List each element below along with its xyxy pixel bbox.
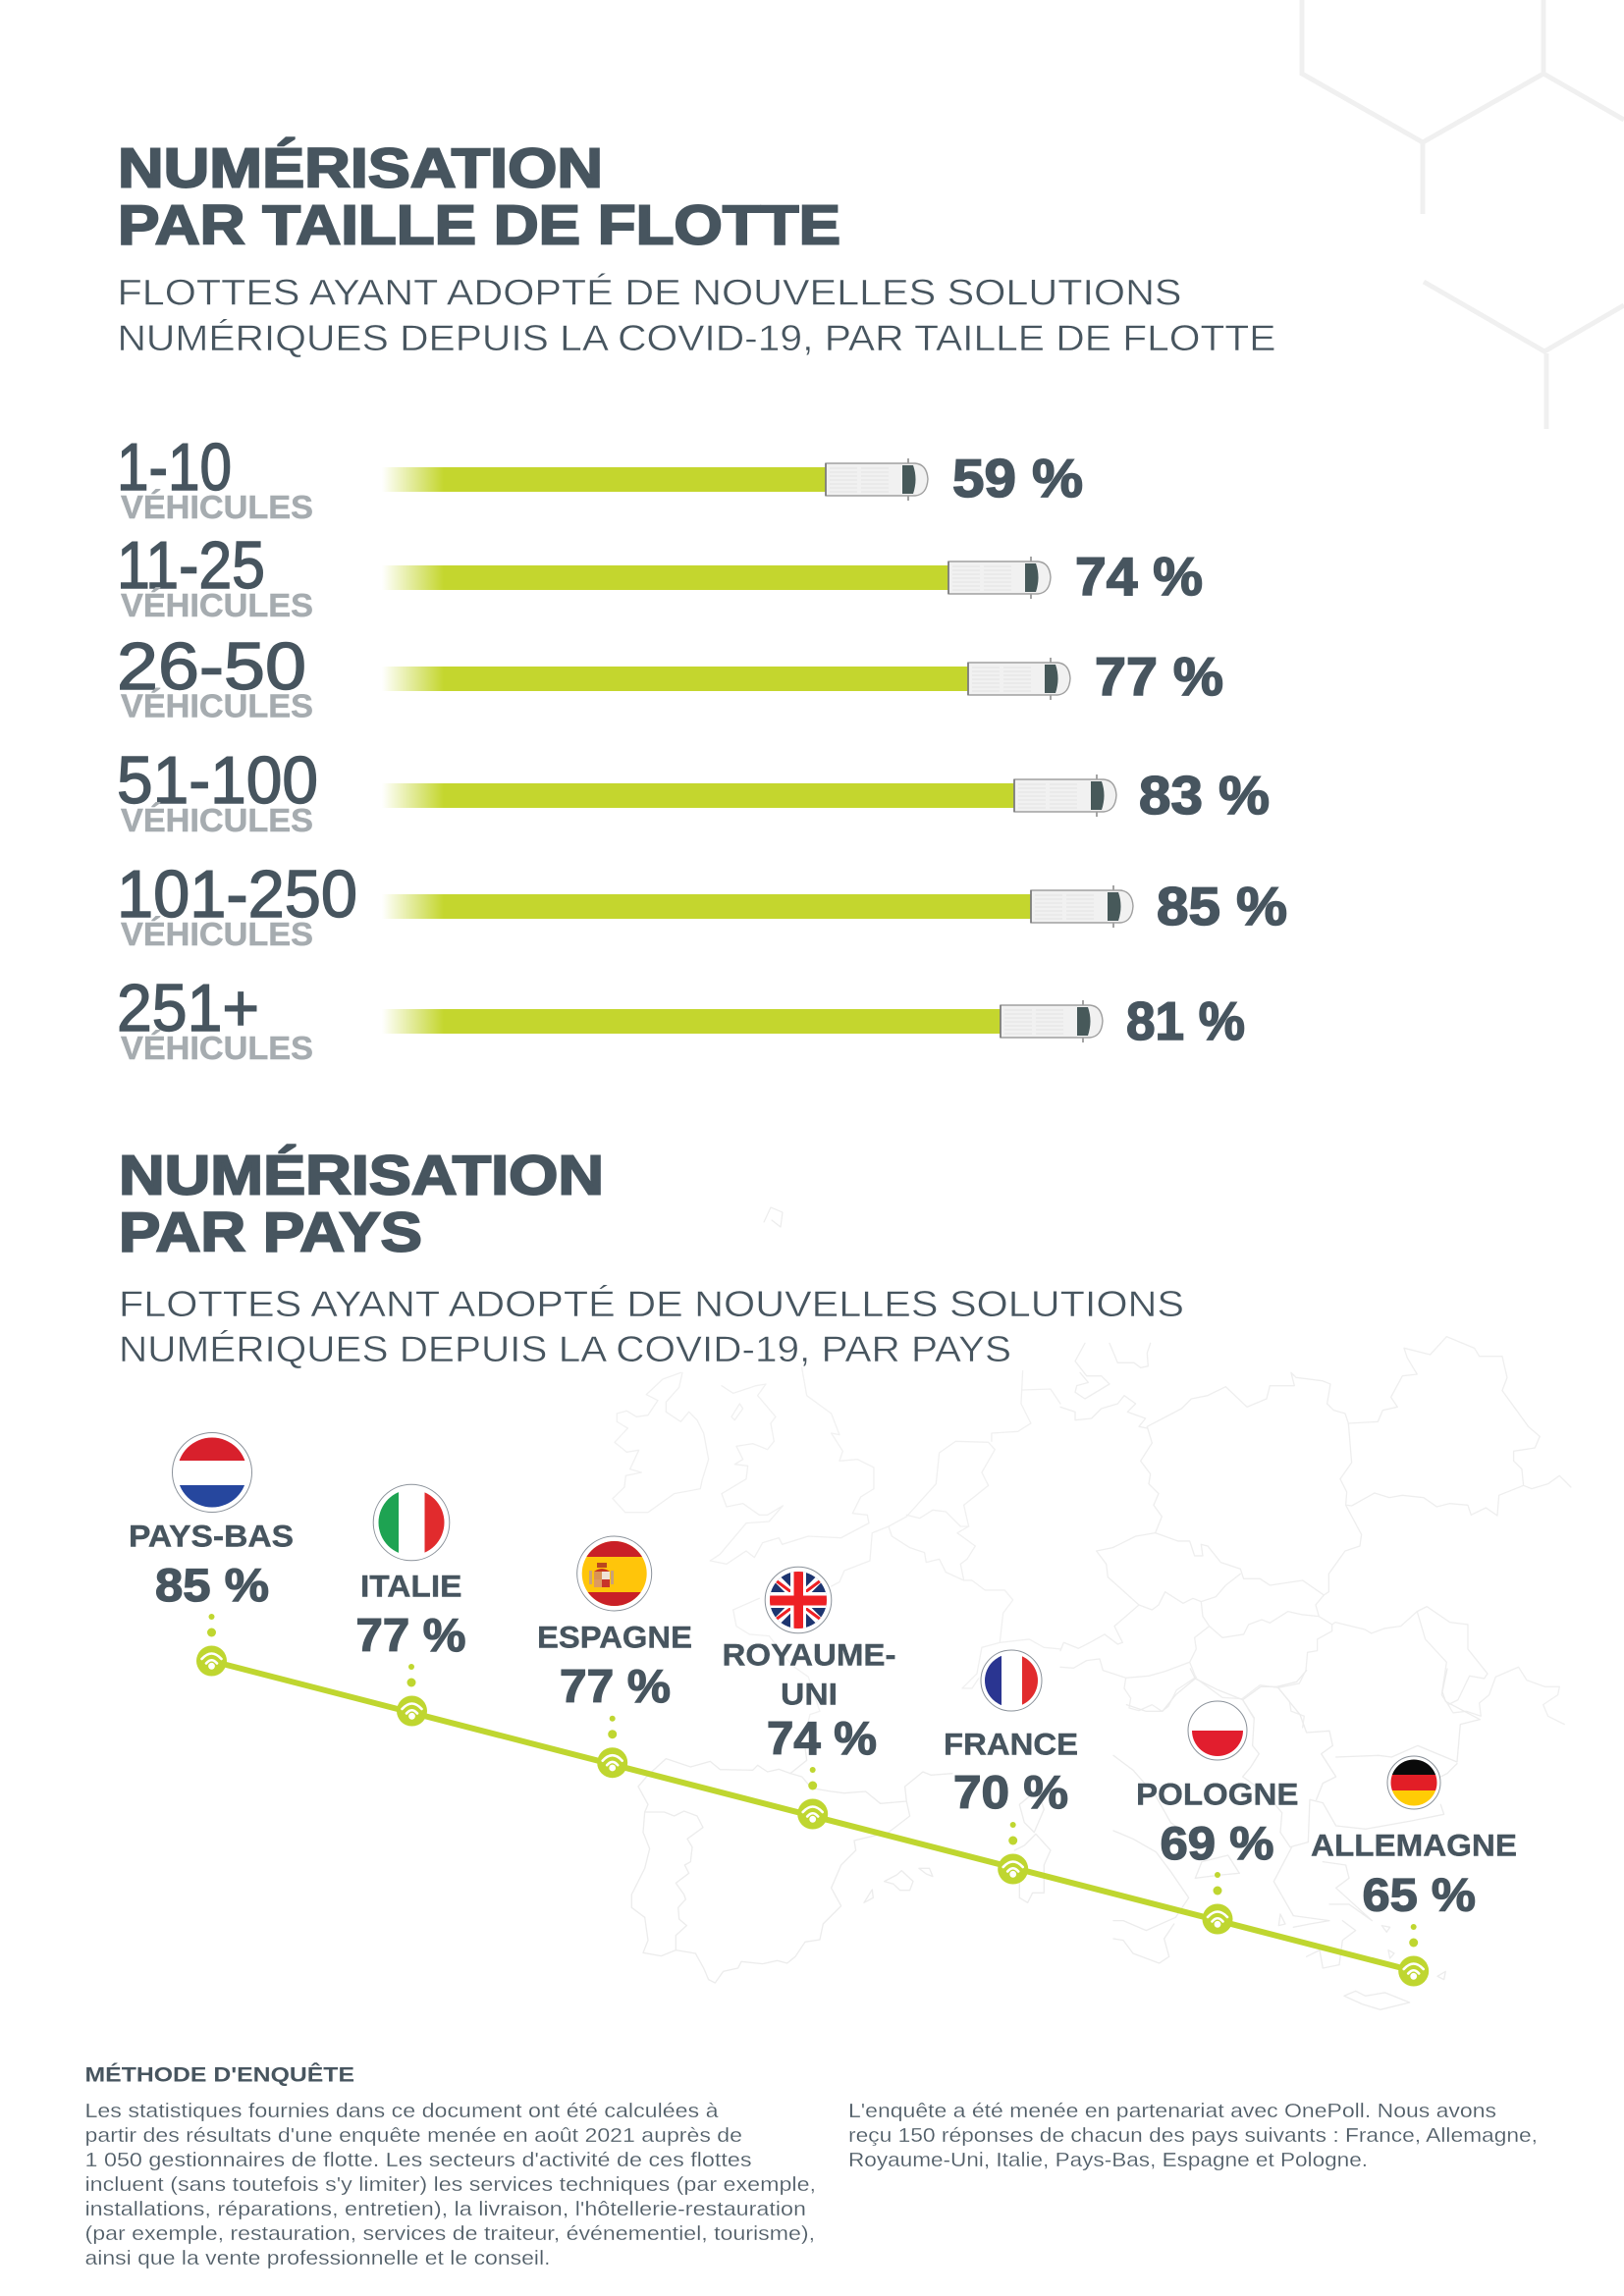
bar row: 251+ vehicles 81% [117, 971, 1245, 1066]
bar row: 26-50 vehicles 77%: VÉHICULES [121, 687, 313, 724]
country: Pays-Bas 85%: 85 % [155, 1559, 269, 1611]
country: Pays-Bas 85%: PAYS-BAS [129, 1518, 294, 1553]
country: Allemagne 65% [1311, 1756, 1517, 1987]
decorative hexagon pattern [1302, 0, 1624, 429]
country: France 70%: 70 % [953, 1766, 1068, 1818]
bar row: 1-10 vehicles 59%: VÉHICULES [121, 489, 313, 525]
bar row: 251+ vehicles 81%: 81 % [1126, 990, 1245, 1051]
country: Allemagne 65%: 65 % [1363, 1869, 1476, 1920]
survey method text: left column: (par exemple, restauration, services de traiteur, événementiel, tourisme), [84, 2223, 815, 2245]
bar row: 11-25 vehicles 74%: VÉHICULES [121, 587, 313, 623]
subtitle: country: NUMÉRIQUES DEPUIS LA COVID-19, PAR PAYS [119, 1329, 1011, 1369]
country: France 70% [944, 1650, 1078, 1885]
country: Pologne 69%: POLOGNE [1136, 1777, 1298, 1812]
bar row: 51-100 vehicles 83%: VÉHICULES [121, 802, 313, 838]
bar row: 26-50 vehicles 77% [117, 629, 1223, 724]
bar row: 51-100 vehicles 83%: 83 % [1139, 765, 1270, 826]
bar row: 251+ vehicles 81%: 251+ [117, 971, 259, 1045]
subtitle: fleet size: NUMÉRIQUES DEPUIS LA COVID-19, PAR TAILLE DE FLOTTE [118, 318, 1276, 358]
country: Pologne 69% [1136, 1701, 1298, 1934]
survey method text: left column: incluent (sans toutefois s'y limiter) les services techniques (par exemple, [84, 2174, 816, 2196]
survey method text: left column: ainsi que la vente professionnelle et le conseil. [84, 2248, 550, 2269]
heading: numérisation par taille de flotte: NUMÉRISATION [118, 137, 603, 200]
country: Italie 77%: ITALIE [360, 1569, 461, 1604]
country: Royaume-Uni 74% [723, 1567, 895, 1830]
subtitle: fleet size [118, 273, 1276, 358]
bar row: 101-250 vehicles 85%: 101-250 [117, 857, 357, 932]
heading: numérisation par pays: NUMÉRISATION [119, 1145, 604, 1207]
survey method text: right column: reçu 150 réponses de chacun des pays suivants : France, Allemagne, [848, 2125, 1538, 2147]
subtitle: country [119, 1284, 1184, 1369]
bar row: 101-250 vehicles 85% [117, 857, 1287, 952]
heading: numérisation par taille de flotte: PAR TAILLE DE FLOTTE [118, 194, 840, 257]
country: Royaume-Uni 74%: ROYAUME- [723, 1637, 895, 1673]
bar row: 1-10 vehicles 59%: 1-10 [117, 430, 232, 505]
country: Italie 77%: 77 % [355, 1609, 465, 1661]
survey method text: left column: installations, réparations, entretien), la livraison, l'hôtellerie-restauration [84, 2199, 806, 2220]
bar row: 101-250 vehicles 85%: 85 % [1157, 876, 1287, 936]
bar row: 11-25 vehicles 74%: 11-25 [117, 528, 265, 603]
subtitle: fleet size: FLOTTES AYANT ADOPTÉ DE NOUVELLES SOLUTIONS [118, 273, 1182, 312]
country: Espagne 77%: 77 % [560, 1660, 671, 1712]
country: Allemagne 65%: ALLEMAGNE [1311, 1828, 1517, 1863]
background map of Europe [613, 1207, 1571, 2009]
survey method text: left column [84, 2101, 816, 2269]
bar row: 1-10 vehicles 59% [117, 430, 1083, 525]
trend line [211, 1661, 1414, 1971]
heading: numérisation par pays [119, 1145, 604, 1264]
country: Italie 77% [355, 1484, 465, 1726]
survey method heading: MÉTHODE D'ENQUÊTE [84, 2063, 354, 2087]
country: France 70%: FRANCE [944, 1726, 1078, 1761]
country: Royaume-Uni 74%: UNI [781, 1677, 838, 1712]
bar row: 51-100 vehicles 83% [117, 743, 1270, 838]
survey method text: left column: Les statistiques fournies dans ce document ont été calculées à [84, 2101, 720, 2122]
bar row: 51-100 vehicles 83%: 51-100 [117, 743, 318, 818]
country: Espagne 77% [537, 1536, 692, 1778]
survey method text: right column [848, 2101, 1538, 2171]
bar row: 26-50 vehicles 77%: 77 % [1095, 646, 1223, 707]
country: Pologne 69%: 69 % [1161, 1817, 1274, 1869]
heading: numérisation par pays: PAR PAYS [119, 1201, 422, 1264]
bar row: 1-10 vehicles 59%: 59 % [952, 448, 1083, 508]
country: Royaume-Uni 74%: 74 % [767, 1712, 877, 1764]
country: Pays-Bas 85% [129, 1433, 294, 1677]
bar row: 26-50 vehicles 77%: 26-50 [117, 629, 306, 704]
bar row: 11-25 vehicles 74%: 74 % [1075, 546, 1203, 607]
heading: numérisation par taille de flotte [118, 137, 840, 257]
bar row: 11-25 vehicles 74% [117, 528, 1203, 623]
survey method text: right column: Royaume-Uni, Italie, Pays-Bas, Espagne et Pologne. [848, 2150, 1368, 2171]
survey method text: right column: L'enquête a été menée en partenariat avec OnePoll. Nous avons [848, 2101, 1496, 2122]
subtitle: country: FLOTTES AYANT ADOPTÉ DE NOUVELLES SOLUTIONS [119, 1284, 1184, 1324]
survey method text: left column: 1 050 gestionnaires de flotte. Les secteurs d'activité de ces flottes [84, 2150, 752, 2171]
country: Espagne 77%: ESPAGNE [537, 1620, 692, 1655]
bar row: 101-250 vehicles 85%: VÉHICULES [121, 916, 313, 952]
survey method text: left column: partir des résultats d'une enquête menée en août 2021 auprès de [84, 2125, 742, 2147]
bar row: 251+ vehicles 81%: VÉHICULES [121, 1030, 313, 1066]
